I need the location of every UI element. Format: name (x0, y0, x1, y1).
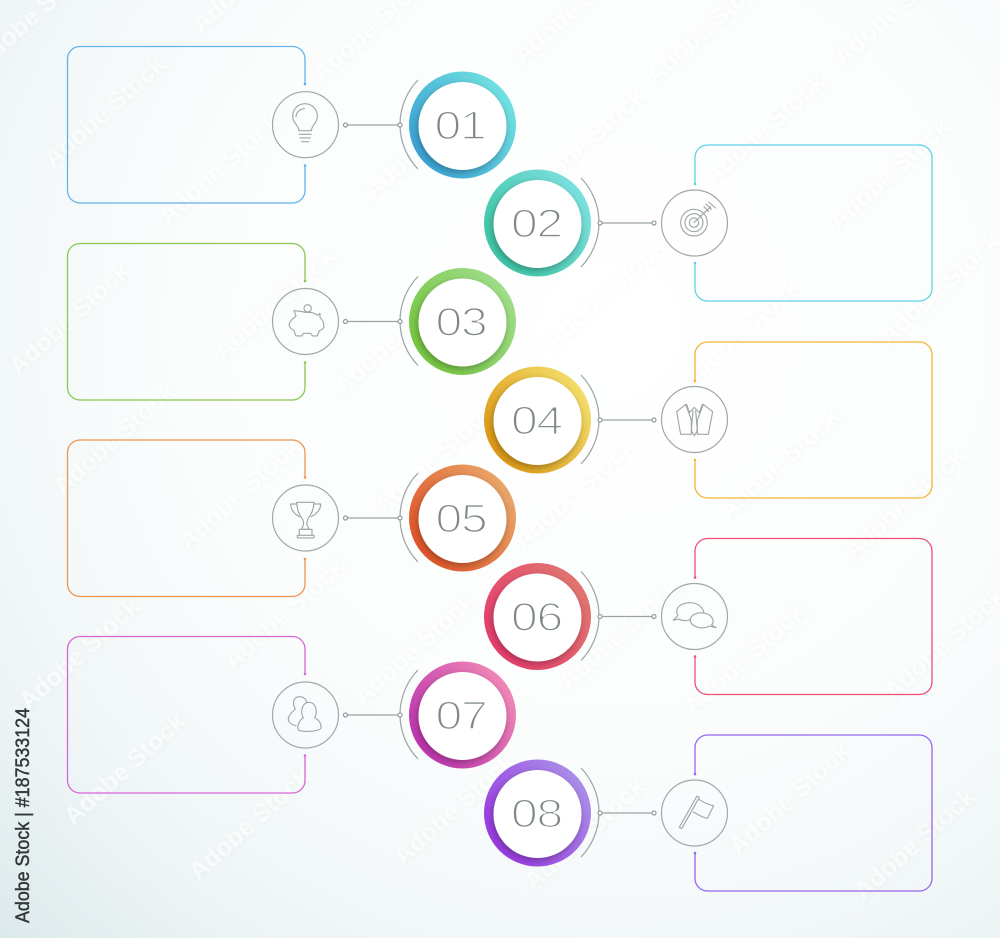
watermark: Adobe Stock (679, 597, 811, 721)
stock id caption: Adobe Stock | #187533124 (13, 708, 34, 923)
watermark: Adobe Stock (329, 277, 461, 401)
number ring 07 (409, 662, 516, 768)
number ring 01: 01 (435, 104, 485, 148)
watermark: Adobe Stock (539, 232, 671, 356)
panel: box 6 red (694, 538, 932, 694)
connector 7 (344, 670, 418, 759)
watermark: Adobe Stock (519, 772, 651, 896)
watermark: Adobe Stock (359, 82, 491, 206)
watermark: Adobe Stock (49, 377, 181, 501)
watermark: Adobe Stock (699, 67, 831, 191)
icon: people (272, 682, 338, 748)
connector 5 (344, 473, 418, 562)
watermark: Adobe Stock (4, 257, 136, 381)
watermark: Adobe Stock (849, 782, 981, 906)
number ring 06: 06 (511, 595, 562, 640)
number ring 03: 03 (436, 300, 486, 345)
watermark: Adobe Stock (554, 572, 686, 696)
watermark: Adobe Stock (184, 762, 316, 886)
icon: light bulb (272, 92, 338, 158)
number ring 05: 05 (436, 497, 486, 541)
watermark: Adobe Stock (39, 50, 171, 174)
watermark: Adobe Stock (674, 272, 806, 396)
watermark: Adobe Stock (509, 432, 641, 556)
watermark: Adobe Stock (839, 442, 971, 566)
number ring 08 (484, 760, 591, 866)
panel: box 7 magenta (68, 636, 306, 793)
panel: box 5 orange (68, 440, 306, 596)
icon: business suit (662, 386, 728, 452)
connector 2 (581, 178, 656, 267)
connector 8 (581, 768, 656, 857)
panel: box 1 blue (68, 46, 306, 203)
icon: flag (662, 780, 728, 846)
number ring 04 (484, 366, 591, 474)
number ring 08: 08 (511, 792, 562, 836)
watermark: Adobe Stock (209, 242, 341, 366)
watermark: Adobe Stock (714, 402, 846, 526)
icon: piggy bank (272, 288, 338, 354)
watermark: Adobe Stock (14, 592, 146, 716)
watermark: Adobe Stock (824, 112, 956, 236)
panel: box 3 green (68, 244, 306, 400)
watermark: Adobe Stock (389, 747, 521, 871)
watermark: Adobe Stock (174, 432, 306, 556)
watermark: Adobe Stock (154, 107, 286, 231)
panel: box 2 cyan (694, 145, 932, 301)
number ring 04: 04 (511, 399, 563, 443)
number ring 05 (409, 464, 516, 572)
number ring 01 (409, 72, 516, 178)
watermark: Adobe Stock (519, 82, 651, 206)
number ring 02: 02 (511, 202, 562, 246)
number ring 06 (484, 563, 591, 670)
icon: speech bubbles (662, 584, 728, 650)
icon: trophy (272, 485, 338, 551)
watermark: Adobe Stock (349, 587, 481, 711)
watermark: Adobe Stock (724, 737, 856, 861)
number ring 07: 07 (436, 694, 486, 738)
icon: target (662, 190, 728, 256)
panel: box 4 yellow (694, 342, 932, 498)
watermark: Adobe Stock (219, 552, 351, 676)
number ring 03 (409, 268, 516, 375)
connector 4 (581, 375, 656, 464)
watermark: Adobe Stock (369, 397, 501, 521)
connector 6 (581, 572, 656, 660)
panel: box 8 purple (694, 735, 932, 891)
connector 3 (344, 276, 418, 366)
number ring 02 (484, 170, 591, 276)
watermark: Adobe Stock (59, 707, 191, 831)
connector 1 (344, 80, 418, 169)
